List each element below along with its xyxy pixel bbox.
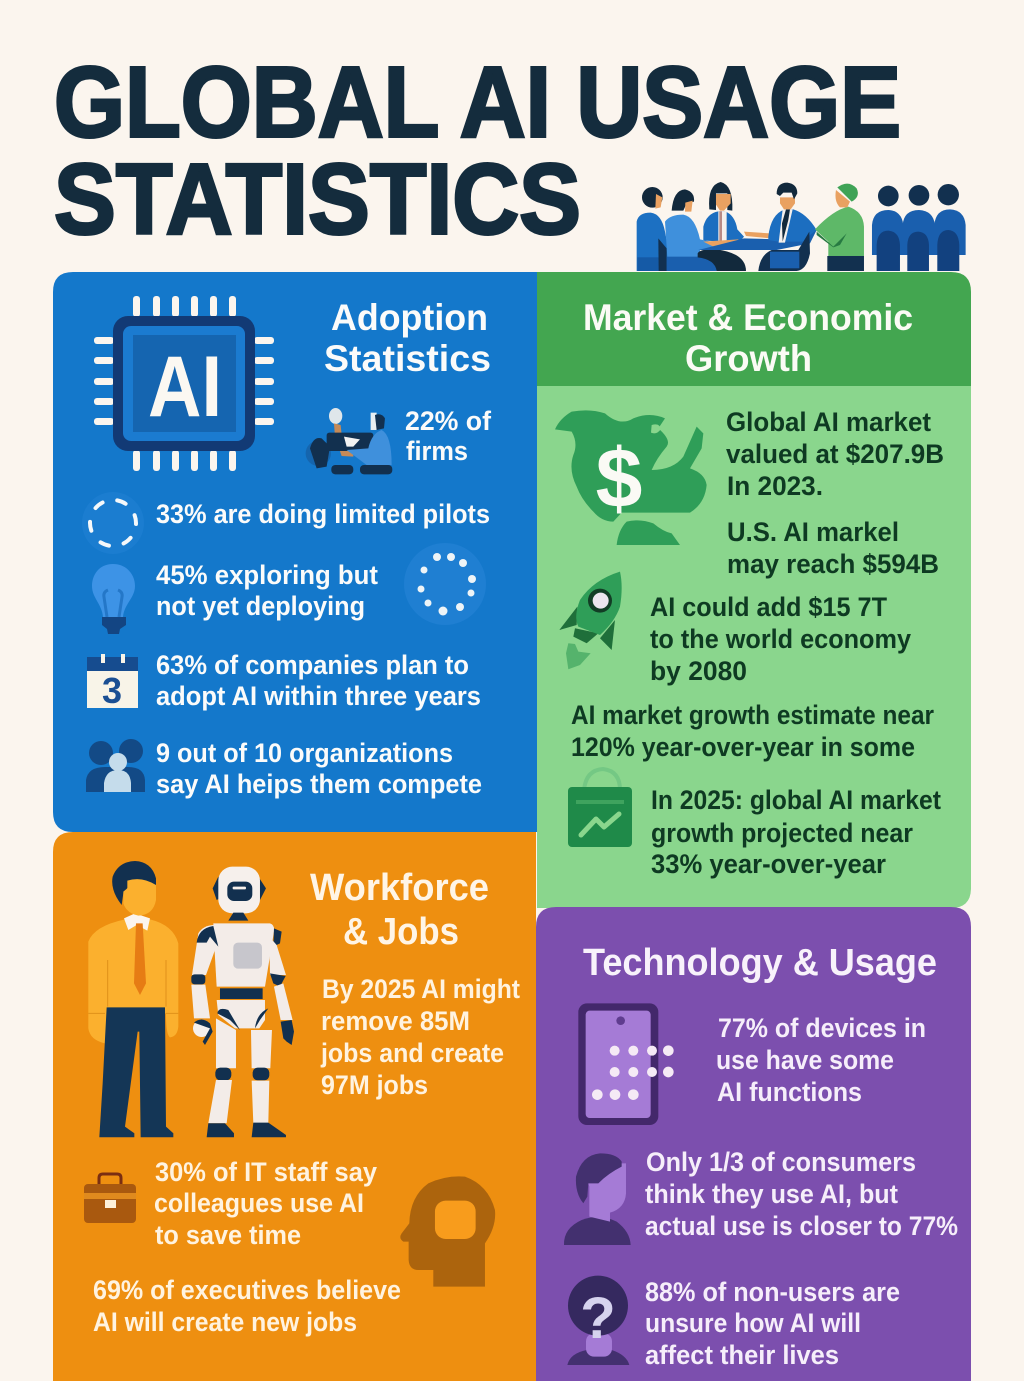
icon: calendar (87, 654, 138, 711)
stat: non-users: 88% of non-users are (645, 1277, 900, 1307)
icon: head silhouette (400, 1176, 495, 1287)
stat: 45% exploring: 45% exploring but (156, 560, 378, 590)
icon: smartphone with dots (578, 1003, 674, 1125)
stat: consumers: think they use AI, but (645, 1179, 898, 1209)
icon: map with dollar sign (555, 410, 707, 545)
icon: calendar: 3 (102, 670, 122, 711)
icon: person silhouette (564, 1153, 631, 1245)
stat: 2025 projection: 33% year-over-year (651, 849, 886, 879)
panel: adoption statistics (53, 272, 537, 832)
stat: U.S. market: U.S. AI markel (727, 517, 899, 547)
table (698, 230, 817, 250)
icon: briefcase (84, 1174, 136, 1223)
stat: global market: In 2023. (727, 471, 823, 501)
heading: market and economic growth: Growth (685, 338, 812, 379)
stat: executives: 69% of executives believe (93, 1275, 401, 1305)
stat: 45% exploring (156, 560, 378, 621)
title: STATISTICS (54, 144, 581, 256)
stat: jobs removed and created: By 2025 AI might (322, 974, 520, 1004)
icon: dashed circle (82, 492, 144, 554)
stat: global market: Global AI market (726, 407, 931, 437)
stat: growth estimate: 120% year-over-year in some (571, 732, 915, 762)
stat: non-users: unsure how AI will (645, 1308, 861, 1338)
stat: 2025 projection: growth projected near (651, 818, 913, 848)
stat: growth estimate: AI market growth estimate near (571, 700, 934, 730)
stat: devices: AI functions (717, 1077, 862, 1107)
stat: U.S. market (727, 517, 939, 579)
icon: rocket (559, 572, 622, 669)
stat: jobs removed and created: jobs and create (320, 1038, 504, 1068)
stat: consumers (645, 1147, 958, 1241)
stat: IT staff: to save time (155, 1220, 301, 1250)
person 2 (665, 215, 722, 257)
stat: 9 out of 10 (156, 738, 482, 799)
stat: IT staff: 30% of IT staff say (155, 1157, 377, 1187)
stat: devices: use have some (716, 1045, 894, 1075)
stat: 22% of firms: firms (406, 436, 468, 466)
stat: world economy: AI could add $15 7T (650, 592, 887, 622)
person 5 (815, 207, 864, 257)
illustration: team meeting around a table (637, 182, 966, 271)
heading: workforce and jobs (310, 867, 489, 953)
icon: people at a laptop (306, 408, 392, 474)
stat: 22% of firms: 22% of (405, 406, 492, 436)
stat: global market: valued at $207.9B (726, 439, 944, 469)
heading: workforce and jobs: & Jobs (343, 911, 459, 953)
title (54, 46, 901, 256)
stat: world economy: to the world economy (650, 624, 911, 654)
stat: world economy (650, 592, 911, 686)
stat: jobs removed and created (320, 974, 520, 1100)
icon: AI chip: AI (148, 339, 222, 435)
stat: consumers: actual use is closer to 77% (645, 1211, 958, 1241)
icon: head with question mark (567, 1276, 629, 1365)
icon: AI chip (94, 296, 274, 471)
icon: group of people (86, 739, 145, 792)
stat: IT staff (154, 1157, 377, 1250)
heading: technology and usage: Technology & Usage (583, 942, 937, 984)
heading: adoption statistics (324, 297, 491, 379)
title: GLOBAL AI USAGE (54, 46, 901, 158)
stat: 9 out of 10: say AI heips them compete (156, 769, 482, 799)
icon: growth chart bag (568, 769, 632, 847)
stat: 63% plan to adopt: 63% of companies plan to (156, 650, 469, 680)
audience (878, 184, 959, 206)
heading: workforce and jobs: Workforce (310, 867, 489, 909)
stat: executives (93, 1275, 401, 1337)
stat: 2025 projection: In 2025: global AI market (651, 785, 941, 815)
stat: 2025 projection (651, 785, 941, 879)
heading: market and economic growth (583, 297, 913, 379)
stat: consumers: Only 1/3 of consumers (646, 1147, 916, 1177)
panel: technology and usage (536, 907, 971, 1381)
person 3 and lap (698, 249, 746, 271)
stat: jobs removed and created: remove 85M (321, 1006, 470, 1036)
stat: world economy: by 2080 (650, 656, 747, 686)
illustration: humanoid robot (191, 867, 294, 1137)
stat: IT staff: colleagues use AI (154, 1188, 364, 1218)
illustration: businessman (88, 861, 178, 1137)
stat: 22% of firms (405, 406, 492, 466)
heading: adoption statistics: Adoption (331, 297, 488, 338)
stat: non-users (645, 1277, 900, 1370)
icon: light bulb (92, 564, 135, 634)
panel: workforce and jobs (53, 832, 536, 1381)
stat: devices (716, 1013, 926, 1107)
heading: adoption statistics: Statistics (324, 338, 491, 379)
icon: map with dollar sign: $ (596, 431, 642, 525)
stat: growth estimate (571, 700, 934, 762)
stat: 63% plan to adopt: adopt AI within three years (156, 681, 481, 711)
stat: 63% plan to adopt (156, 650, 481, 711)
stat: executives: AI will create new jobs (93, 1307, 357, 1337)
stat: devices: 77% of devices in (718, 1013, 926, 1043)
heading: market and economic growth: Market & Economic (583, 297, 913, 338)
panel: market and economic growth (537, 272, 971, 908)
stat: non-users: affect their lives (645, 1340, 839, 1370)
stat: 45% exploring: not yet deploying (156, 591, 365, 621)
icon: head with question mark: ? (580, 1286, 616, 1351)
stat: jobs removed and created: 97M jobs (321, 1070, 428, 1100)
person 1 (637, 213, 670, 271)
stat: 33% limited pilots: 33% are doing limited pilots (156, 499, 490, 529)
person 4 (768, 209, 817, 242)
stat: 9 out of 10: 9 out of 10 organizations (156, 738, 453, 768)
icon: dotted circle (404, 543, 486, 625)
stat: U.S. market: may reach $594B (727, 549, 939, 579)
stat: global market (726, 407, 944, 501)
